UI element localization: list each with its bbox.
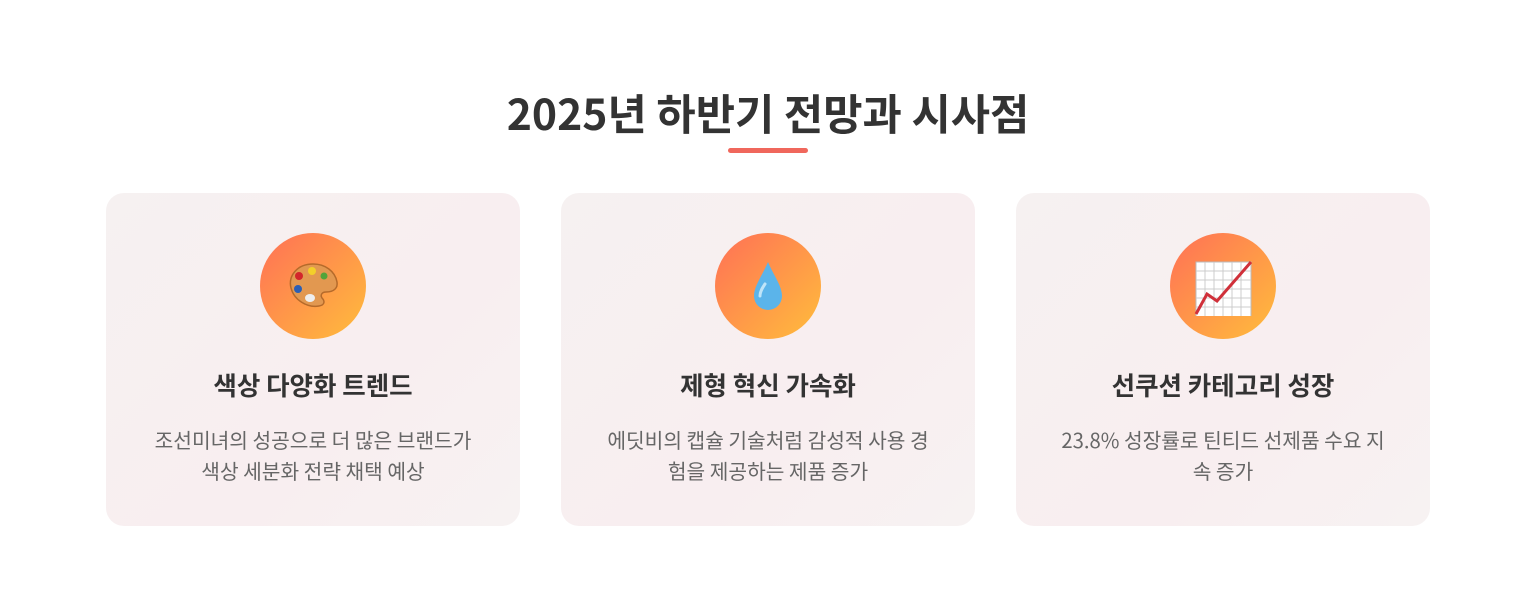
icon: chart	[1170, 233, 1276, 339]
title underline	[728, 148, 808, 153]
description	[1061, 424, 1385, 485]
icon: palette	[260, 233, 366, 339]
icon: water drop	[715, 233, 821, 339]
heading: 제형 혁신 가속화	[680, 366, 856, 403]
description: 조선미녀의 성공으로 더 많은 브랜드가	[155, 424, 471, 454]
panel: sun cushion growth	[1016, 193, 1430, 526]
description	[607, 424, 929, 485]
panel: color trend	[106, 193, 520, 526]
description: 험을 제공하는 제품 증가	[668, 455, 868, 485]
description: 색상 세분화 전략 채택 예상	[201, 455, 425, 485]
description: 23.8% 성장률로 틴티드 선제품 수요 지	[1061, 424, 1385, 454]
description	[155, 424, 471, 485]
description: 에딧비의 캡슐 기술처럼 감성적 사용 경	[607, 424, 929, 454]
heading: 선쿠션 카테고리 성장	[1112, 366, 1334, 403]
panel: formulation innovation	[561, 193, 975, 526]
title: 2025년 하반기 전망과 시사점	[507, 81, 1029, 143]
heading: 색상 다양화 트렌드	[213, 366, 413, 403]
description: 속 증가	[1193, 455, 1253, 485]
